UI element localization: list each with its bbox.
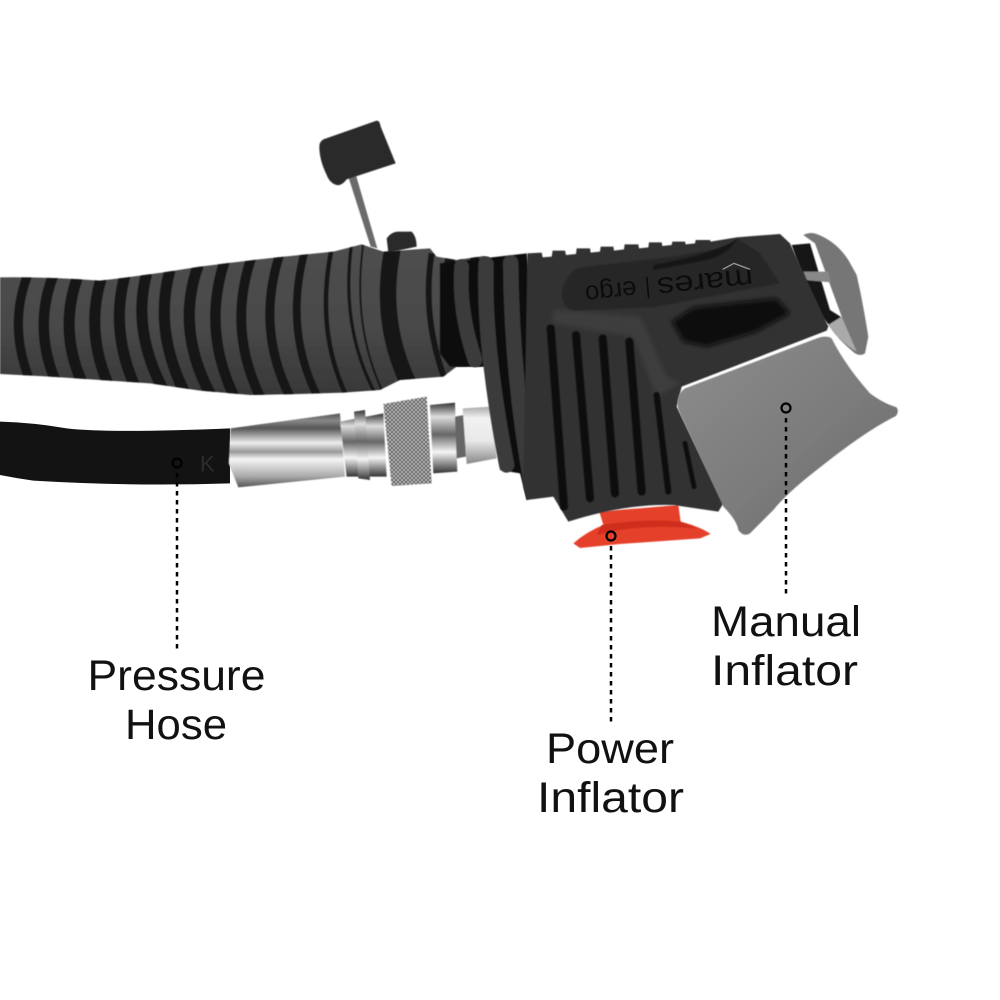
logo text: ergo [584,275,638,310]
callout: pressure hose: Hose [125,701,227,749]
corrugated hose [0,243,497,400]
inflator diagram [0,120,898,812]
callout: pressure hose [88,458,266,749]
inflator body [440,233,898,548]
callout: power inflator [537,532,684,822]
body grooves [551,328,694,507]
pressure hose [0,422,230,485]
callout: power inflator: Power [546,725,674,773]
callout: manual inflator [711,404,861,695]
ribs near body [440,253,547,500]
icon: dust cap [319,121,417,253]
callout: pressure hose: Pressure [88,652,266,700]
manual inflator button [677,337,898,535]
corrugated hose and cap [0,121,497,487]
callout: manual inflator: Inflator [711,647,858,695]
shoulder shading [553,310,680,397]
grip recess [562,238,780,311]
manual knob [792,233,868,355]
hose marking: K [200,452,215,477]
logo text [584,261,755,310]
inflator body shell [523,234,828,522]
power inflator button [573,505,711,548]
callout: manual inflator: Manual [711,598,861,646]
logo text: mares [655,261,755,303]
callout: power inflator: Inflator [537,774,684,822]
metal fitting [229,397,497,487]
